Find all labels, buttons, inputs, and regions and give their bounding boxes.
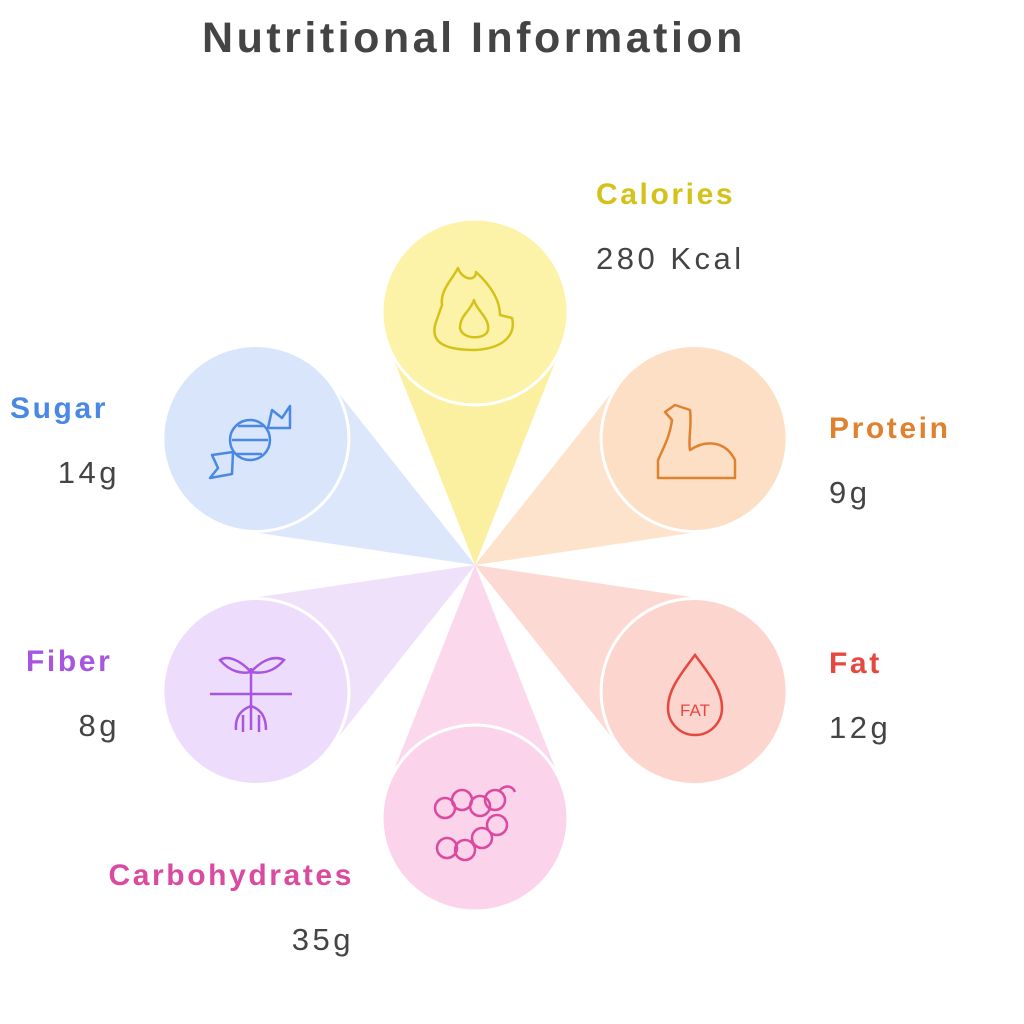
icon: candy [210, 406, 290, 478]
petal: carbohydrates [382, 565, 568, 911]
icon: flame [434, 268, 513, 350]
label: fiber: Fiber [26, 645, 112, 678]
label: protein [829, 412, 951, 510]
label: sugar: 14g [58, 455, 120, 490]
label: protein: 9g [829, 475, 870, 510]
label: carbohydrates: Carbohydrates [108, 859, 354, 892]
petal: fat [428, 484, 821, 819]
label: protein: Protein [829, 412, 951, 445]
icon: fat drop [668, 655, 722, 735]
petal: sugar [129, 311, 521, 646]
icon: muscle arm [658, 405, 735, 478]
label: fiber: 8g [79, 708, 120, 743]
label: fat: 12g [829, 710, 891, 745]
petal: fiber [129, 484, 521, 819]
petal: protein [428, 311, 821, 646]
label: calories [596, 178, 745, 276]
label: carbohydrates [108, 859, 354, 957]
label: sugar [10, 392, 120, 490]
label: sugar: Sugar [10, 392, 108, 425]
label: fat: Fat [829, 647, 882, 680]
label: carbohydrates: 35g [292, 922, 354, 957]
label: fiber [26, 645, 120, 743]
petal: calories [382, 219, 568, 565]
label: fat [829, 647, 891, 745]
icon: grains [435, 786, 515, 860]
icon: fat drop: FAT [680, 701, 710, 720]
label: calories: Calories [596, 178, 735, 211]
icon: sprout [210, 658, 292, 732]
title: Nutritional Information [202, 14, 746, 62]
label: calories: 280 Kcal [596, 241, 745, 276]
